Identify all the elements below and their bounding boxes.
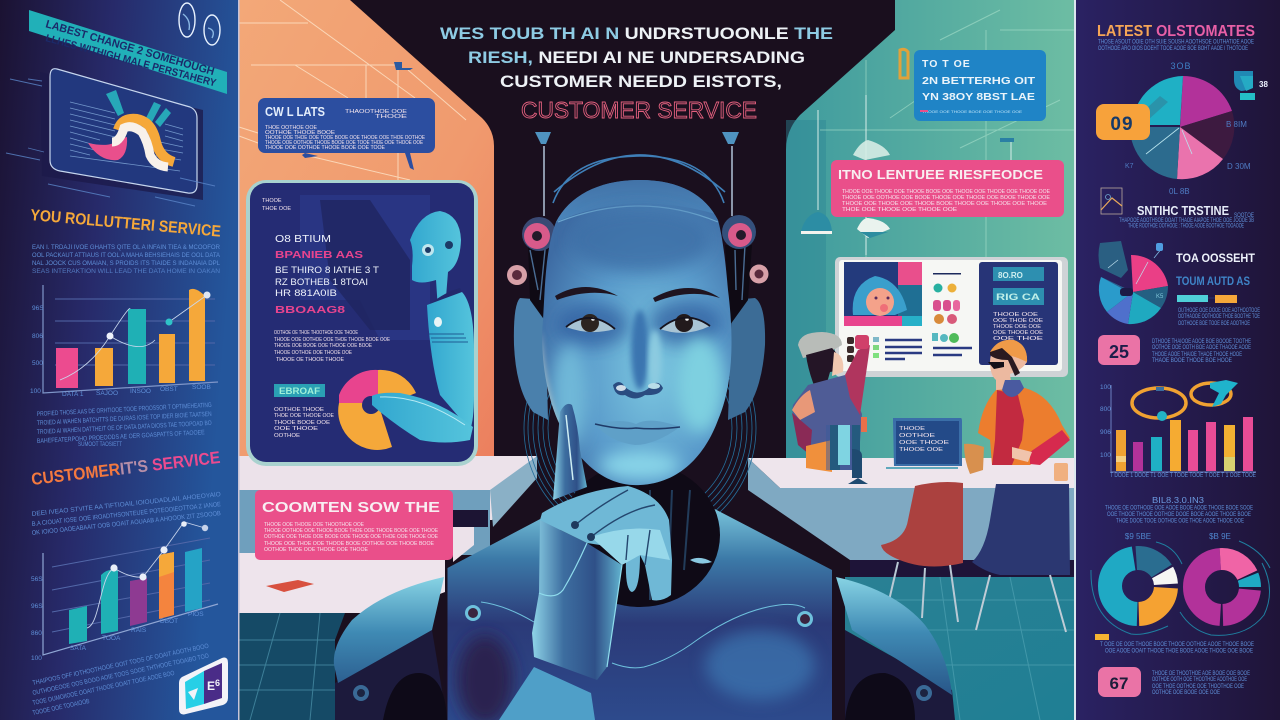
text block: tablet copy: BE THIRO 8 IATHE 3 T <box>275 265 379 276</box>
pie chart: top: D 30M <box>1227 162 1251 171</box>
bar chart: customer service: SATA <box>70 645 87 652</box>
bar chart: customer service: 860 <box>31 630 42 637</box>
pie chart: second <box>1098 241 1168 324</box>
text block: under chart: BAHEFEATERPOHO PROEOODS AE OER GOASPATTS OF TAOOEE <box>37 429 205 445</box>
panel: wall monitor: THOOE OOE OOE <box>993 324 1041 330</box>
text block: bottom left: OUTHOOEOOE OOS BOOO AOIE TOOS SOOE THTHOOE TOOAIBO TOO <box>32 653 209 697</box>
callout: coomten sow the: OOTHOE THOE OOE THOOE OOE THOOE <box>264 547 368 553</box>
callout: 67 <box>1098 667 1141 697</box>
panel: wall monitor: OOE THOOE OOE <box>993 330 1043 336</box>
pie chart: tablet <box>338 370 416 450</box>
text block: customer service: B.A CIOUAT IOSE OOE IROADTHSONTEUEE POTEOOIEOTTOA Z IANOE <box>31 501 222 528</box>
bar chart: customer service: DBOT <box>160 618 178 625</box>
robot: arm and hand <box>499 404 672 720</box>
callout: pink response: THOOE OOE OOTHOE OOE BOOE THOOE OOE THOOE OOE BOOE THOOE OOE <box>842 195 1050 201</box>
text block: bottom left <box>32 643 209 717</box>
callout: 09 <box>1096 104 1150 140</box>
pie chart: top: B 8IM <box>1226 120 1247 129</box>
legend swatch <box>1095 634 1109 640</box>
illustration: laptop: OOE THOOE <box>899 440 949 446</box>
bar chart: right: 100 <box>1100 452 1111 459</box>
panel: tablet <box>246 180 478 466</box>
text block: tablet copy: THOOE <box>262 198 282 204</box>
callout: cw lats: THOOE OOE OOTHOE THOOE BOOE OOE TOOE THOE OOE THOOE OOE <box>265 140 423 146</box>
text block: customer service <box>31 491 222 537</box>
left desk and lower table <box>239 456 537 720</box>
callout: coomten sow the: THOOE OOTHOE OOE THOOE BOOE THOE OOE THOOE BOOE OOE THOOE <box>264 528 438 534</box>
text block: customer service: OK IOIOO OAOEABAAIT OOB OOAIT AOUAAB A AHOOOK ZIT ZSOOOB <box>31 510 221 537</box>
callout: pink response: THOE OOE THOOE OOE THOOE OOE <box>842 207 957 213</box>
text block: top osset <box>1178 307 1260 327</box>
bar chart: customer service: PIOS <box>188 611 204 618</box>
donut chart: left <box>1091 532 1182 634</box>
title: CUSTOMER SERVICE <box>521 97 757 123</box>
heading: latest customers: LATEST OLSTOMATES <box>1097 23 1255 40</box>
bar chart: left top: 96S <box>32 305 44 312</box>
callout: cw lats: THAOOTHOE OOE <box>345 109 407 115</box>
callout: 25: 25 <box>1109 342 1129 362</box>
text block: tablet copy: O8 BTIUM <box>275 233 331 245</box>
bar chart: left top: 806 <box>32 333 43 340</box>
text: top osset <box>1176 251 1256 288</box>
robot: antennae and halo <box>535 132 739 216</box>
illustration: laptop <box>886 418 984 474</box>
panel: left room (orange) <box>239 0 494 458</box>
text block: under chart: PROFIED THOSE AAS DE ORHTIOOE TOOE PROOSSOR T OPTIMEHEATING <box>37 402 212 418</box>
text block: 67: OOTHOE OOE BOOE OOE OOE <box>1152 689 1220 696</box>
text block: sntic <box>1119 212 1254 230</box>
callout: blue note: YN 38OY 8BST LAE <box>922 91 1035 103</box>
text block: left intro: NAL JOOCK CUS OMAIAN, S PROIDS ITS TIAIDE S INDANAIA DPL <box>32 260 220 267</box>
text block: tablet copy: BBOAAG8 <box>275 304 345 316</box>
icon: bottom corner app: 6 <box>215 678 220 688</box>
text block: tablet copy: THOOE OOTHOE OOE THOOE OOE <box>274 350 352 356</box>
text block: under chart: TROIED AI WAHEN DATTHEIT OE OF DATA DATA DIOSS TAE TOOPOAD BO <box>37 420 212 436</box>
robot: head <box>542 180 732 485</box>
callout: pink response: THOOE OOE THOOE OOE THOOE BOOE THOOE OOE THOOE OOE THOOE <box>842 201 1047 207</box>
callout: coomten sow the <box>255 490 453 560</box>
robot: eyes <box>566 314 710 333</box>
panel: wall monitor: OOE THOE OOE <box>993 318 1043 324</box>
callout: cw lats: THOOE <box>375 114 408 120</box>
robot: ears and mechanics <box>507 215 768 420</box>
text: top osset: TOUM AUTD AS <box>1176 274 1250 288</box>
icon: outlined frame <box>1101 188 1122 214</box>
illustration: laptop: THOOE OOE <box>899 447 943 453</box>
callout: coomten sow the: OOTHOE OOE THOE OOE BOOE OOE THOOE OOE THOE OOE THOOE OOE <box>264 534 438 540</box>
icon: bottom corner app: E <box>207 679 215 693</box>
bar chart: customer service: RAIS <box>131 627 147 634</box>
title: RIESH, NEEDI AI NE UNDERSADING <box>468 48 805 67</box>
text block: left intro: SEAS INTERAKTION WILL LEAD THE DATA HOME IN OAKAN <box>32 268 220 275</box>
bar chart: customer service: 56S <box>31 576 43 583</box>
robot: nose <box>613 382 663 398</box>
heading: customer service: CUSTOMERIT'S SERVICE <box>30 448 221 489</box>
pie chart: top: 0L 8B <box>1169 187 1190 196</box>
text block: under chart: TROIED AI WAHEN BATCHTTS DE DURAS IOSE TOP IDER BIOIE TAATSEN <box>37 411 212 427</box>
illustration: ai figure <box>372 211 474 442</box>
panel: right sidebar <box>1074 0 1280 720</box>
bar chart: right: 800 <box>1100 406 1111 413</box>
text block: 67 <box>1152 670 1250 696</box>
text block: left intro: EAN I. TRDAJI IVOE GHAHTS QITE OL A INFAIN TIEA & MCOOFOR <box>32 244 220 251</box>
legend tags <box>1177 295 1237 303</box>
right desk and floor <box>748 458 1075 720</box>
banner: top teal <box>29 10 227 94</box>
text block: tablet copy: THOE OOE <box>262 206 291 212</box>
tag: ebroaf <box>274 384 325 397</box>
bar chart: left top: SAJOO <box>96 390 118 397</box>
callout: cw lats: THOE OOTHOE OOE <box>265 125 317 131</box>
callout: coomten sow the: THOOE OOE THOOE OOE THOOTHOE OOE <box>264 522 364 528</box>
panel: wall monitor: RIG CA <box>996 292 1041 302</box>
text block: heading note <box>1098 38 1254 52</box>
robot: eyebrows <box>555 287 720 302</box>
text block: tablet lower: OOTHOE THOOE <box>274 407 324 413</box>
bar chart: customer service <box>31 521 218 662</box>
tag: ebroaf: EBROAF <box>279 386 321 396</box>
text block: under chart <box>37 402 212 448</box>
callout: blue note: THOOE OOE THOOE BOOE OOE THOOE OOE <box>922 109 1022 114</box>
bar chart: customer service: 100 <box>31 655 42 662</box>
text block: bottom left: TOOE OUMOIIOOE OOAIT THOOE OOAIT TOOE AOOE BOO <box>32 670 175 707</box>
callout: pink response: THOOE OOE THOOE OOE THOOE BOOE OOE THOOE OOE THOOE OOE THOOE OOE <box>842 189 1050 195</box>
robot: torso <box>448 495 832 720</box>
icon: top face ovals <box>179 3 220 45</box>
robot: shoulders and machinery <box>334 577 955 720</box>
bar chart: left top <box>30 285 218 398</box>
bar chart: right <box>1100 380 1257 479</box>
text block: bottom left: TOOOE OOE TOOAIOOB <box>32 698 90 717</box>
text block: tablet lower: THOOE BOOE OOE <box>274 420 330 426</box>
chairs <box>881 482 1070 632</box>
illustration: person right <box>978 340 1070 481</box>
pie chart: top: K7 <box>1125 163 1134 170</box>
text block: customer service: DEEI IVEAO STVITE AA TIFTIOAIL IOIOUDADLAIL AHOEOYAIO <box>31 491 221 518</box>
robot: mouth <box>595 421 680 445</box>
callout: 67: 67 <box>1110 674 1128 693</box>
text block: bar chart note <box>1105 496 1253 524</box>
text block: left intro: OOL PACKAUT ATTIAUS IT OOL A MAHA BEHSIEHAIS DE OOL DATA <box>32 252 221 259</box>
text block: bar chart note: BIL8.3.0.IN3 <box>1152 496 1205 505</box>
text block: tablet copy: RZ BOTHEB 1 8TOAI <box>275 277 368 288</box>
bar chart: left top: INSOO <box>130 388 151 395</box>
callout: coomten sow the: COOMTEN SOW THE <box>262 500 440 516</box>
text block: sntic: SOOTOE <box>1234 212 1254 219</box>
text block: under chart: SUMOOT TAOSIETT <box>78 441 122 448</box>
text block: tablet lower: OOE THOOE <box>274 426 318 432</box>
text block: tablet lower <box>274 407 334 439</box>
title <box>440 24 833 123</box>
icon: shield <box>1234 71 1268 100</box>
pie chart: top <box>1125 61 1251 196</box>
text block: tablet copy: THOOE OE THOOE THOOE <box>276 357 344 363</box>
bar chart: left top: 100 <box>30 388 41 395</box>
heading: sntic tretine: SNTIHC TRSTINE <box>1137 203 1229 218</box>
panel: wall monitor: OOE THOE <box>993 336 1044 342</box>
callout: blue note: TO T OE <box>922 58 971 70</box>
callout: 09: 09 <box>1110 114 1134 135</box>
text block: tablet copy: THOOE OOE OOTHOE OOE THOE THOOE BOOE OOE <box>274 337 390 343</box>
panel: right room (teal) <box>786 0 1075 460</box>
panel: wall monitor: THOOE OOE <box>993 312 1038 318</box>
callout: cw lats: CW L LATS <box>265 104 325 119</box>
text block: tablet lower: THOE OOE THOOE OOE <box>274 413 334 419</box>
callout: blue note <box>900 49 1046 121</box>
text block: left intro <box>32 244 221 275</box>
text block: tablet copy: THOOE OOE BOOE OOE THOOE OOE BOOE <box>274 343 372 349</box>
robot: rings behind head <box>524 312 756 544</box>
icon: bottom corner app <box>179 658 228 714</box>
text block: tablet copy <box>262 198 390 363</box>
title: WES TOUB TH AI N UNDRSTUOONLE THE <box>440 24 833 43</box>
pie chart: top: 3OB <box>1170 61 1192 71</box>
heading: you rollutteri service: YOU ROLLUTTERI SERVICE <box>30 207 222 241</box>
text block: donut note <box>1100 641 1254 654</box>
lamps <box>801 95 1014 255</box>
callout: pink response: ITNO LENTUEE RIESFEODCE <box>838 168 1043 182</box>
text block: 25: THAOE BOOE THOOE BOE HOOE <box>1152 357 1233 364</box>
donut chart: left: $9 5BE <box>1125 532 1151 541</box>
pie chart: second: K5 <box>1156 294 1164 300</box>
title: CUSTOMER NEEDD EISTOTS, <box>500 72 782 91</box>
banner: top teal: LLHES WITHIGH MALE PERSTAHERY <box>44 32 217 89</box>
text block: tablet copy: OOTHOE OE THOE THOOTHOE OOE THOOE <box>274 330 358 336</box>
text block: tablet copy: HR 881A0IB <box>275 288 337 299</box>
bar chart: left top: OBST <box>160 386 178 393</box>
monitor with logo <box>6 69 215 206</box>
bar chart: customer service: 96S <box>31 603 43 610</box>
text block: bottom left: THAIPOOS OFF IOTHOOTHOOE OOIT TOOS OF OOAIT AOOTH BOOO <box>32 643 209 687</box>
illustration: laptop: THOOE <box>899 426 925 432</box>
illustration: person left <box>792 332 870 484</box>
callout: pink response <box>831 160 1064 217</box>
robot: neck cavity <box>560 463 720 607</box>
callout: cw lats <box>258 98 435 170</box>
callout: blue note: 2N BETTERHG OIT <box>922 75 1036 87</box>
callout: cw lats: OOTHOE THOOE BOOE <box>265 130 335 136</box>
panel: wall monitor: 8O.RO <box>998 271 1023 280</box>
illustration: laptop: OOTHOE <box>899 433 935 439</box>
illustration: robot <box>334 132 955 720</box>
donut chart: right <box>1180 532 1270 635</box>
callout: cw lats: THOOE OOE OOTHOE THOOE BOOE OOE TOOE <box>265 145 385 151</box>
bar chart: right: 100 <box>1100 384 1111 391</box>
panel: left sidebar <box>0 0 240 720</box>
callout: coomten sow the: THOOE OOE THOE OOE THOOE BOOE OOTHOE OOE THOOE BOOE <box>264 541 434 547</box>
text block: tablet lower: OOTHOE <box>274 433 300 439</box>
text: top osset: TOA OOSSEHT <box>1176 251 1256 265</box>
bar chart: left top: DATA 1 <box>62 391 84 398</box>
callout: cw lats: THOOE OOE THOE OOE TOOE BOOE OOE THOOE OOE THOE OOTHOE <box>265 135 425 141</box>
icon: shield: 38 <box>1259 80 1268 89</box>
banner: top teal: LABEST CHANGE 2 SOMEHOUGH <box>44 18 216 78</box>
bar chart: customer service: TOOA <box>102 635 121 642</box>
text block: tablet copy: BPANIEB AAS <box>275 249 363 261</box>
panel: wall monitor <box>835 257 1068 377</box>
bar chart: right: 906 <box>1100 429 1111 436</box>
bar chart: left top: 500 <box>32 360 43 367</box>
bar chart: left top: SOOB <box>192 384 211 391</box>
callout: 25 <box>1098 335 1140 365</box>
donut chart: right: $B 9E <box>1209 532 1231 541</box>
robot: face shading <box>542 180 730 485</box>
text block: 25 <box>1152 338 1251 364</box>
